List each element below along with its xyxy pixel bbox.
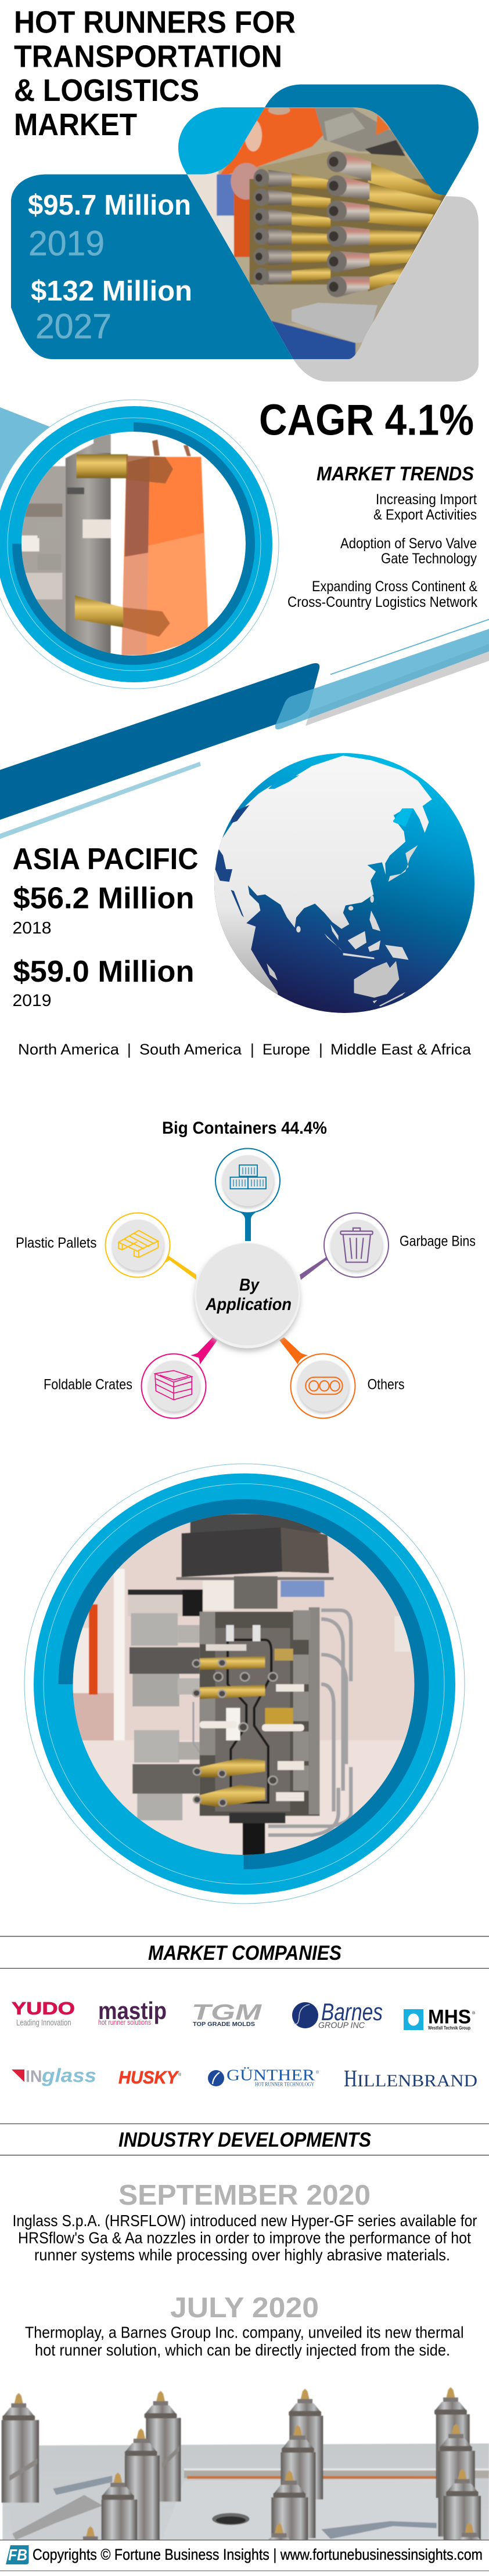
hub: by application [195,1243,300,1351]
2019 value [13,955,194,1010]
logo: Barnes [292,1998,383,2031]
trend 2 [340,536,477,567]
text block: Asia Pacific [13,842,199,1010]
diagonal ribbons [0,620,489,839]
development: September 2020: SEPTEMBER 2020 [118,2180,371,2211]
land: Eurasia and Africa [214,755,432,994]
heading: market trends: MARKET TRENDS [317,463,474,485]
footer [0,2540,489,2571]
logo: Inglass: glass [41,2064,96,2086]
logo: Inglass [12,2064,96,2086]
stat: 2027 value: $132 Million [31,276,192,307]
node: foldable crates [142,1354,206,1418]
icon: crate [155,1370,192,1400]
logo: Inglass: IN [26,2068,42,2086]
text: other regions: North America [18,1041,120,1058]
label: plastic pallets: Plastic Pallets [16,1235,96,1251]
shape: blue ring [0,406,272,682]
shape: thin outer ring [24,1464,465,1904]
panel: large circular photo [24,1464,465,1904]
connector: big containers [240,1213,256,1241]
shape: dark blue stats panel [11,174,293,359]
region name: ASIA PACIFIC [13,842,199,876]
right nozzle row [327,151,444,297]
shape: dark blue arc [66,1506,422,1862]
nozzles: middle row [125,2423,475,2541]
icon: bin [340,1228,373,1262]
stat: 2019 value [28,190,191,263]
diagram: by application [16,1149,476,1418]
text: other regions: Europe [263,1041,310,1058]
photo: mould plate with gold cylinders [16,435,208,668]
photo: nozzles on plate [2,2387,489,2553]
title: TRANSPORTATION [14,39,282,74]
logo: Husky: ® [178,2072,182,2077]
stat: 2019 value: $95.7 Million [28,190,191,221]
logo: MHS: MHS [428,2006,471,2028]
photo: brass hot runner nozzles [187,106,468,360]
logo: Husky: HUSKY [118,2067,179,2087]
logo: Hillenbrand [344,2065,477,2092]
2018 value: 2018 [13,919,51,938]
connector: others [279,1337,308,1365]
nozzles: tips at lower edge [82,2514,481,2540]
logo: TGM [192,2000,263,2028]
node: plastic pallets [106,1213,170,1278]
title: & LOGISTICS [14,73,199,108]
2018 value [13,881,194,938]
photo: hot runner assembly [72,1514,415,1859]
text block: market trends [287,463,477,610]
node: garbage bins [324,1213,389,1278]
logo: MHS [404,2006,476,2031]
icon: containers [230,1165,266,1189]
logo: Yudo: Leading Innovation [16,2018,71,2028]
logo: Yudo: YUDO [12,1998,75,2018]
panel: hero shapes [11,85,479,382]
heading: big containers share: Big Containers 44.4% [162,1119,327,1138]
logo: Yudo [12,1998,75,2028]
logo: Gunther [208,2067,319,2088]
development: July 2020: hot runner solution, which can be directly injected from the side. [35,2341,450,2359]
hub: by application: Application [205,1295,292,1314]
logo: Barnes: GROUP INC [318,2021,365,2031]
icon: others [305,1377,343,1394]
logo: Mastip: mastip [98,1997,167,2024]
2019 value: $59.0 Million [13,955,194,989]
shape: light blue lobe [178,107,265,174]
node: others [290,1354,355,1418]
shape: pale triangle behind ring [0,407,64,499]
globe [214,753,474,1013]
logo: Hillenbrand: H [344,2065,357,2092]
shape: grey backing [293,196,479,382]
development: July 2020 [25,2292,463,2359]
trend 1 [373,491,477,523]
logo: Gunther: HOT RUNNER TECHNOLOGY [255,2082,314,2088]
connector: foldable crates [190,1337,217,1365]
title [14,5,296,142]
hub: by application: By [239,1275,260,1295]
trend 3 [287,578,477,610]
trend 2: Gate Technology [381,551,477,567]
development: September 2020: runner systems while processing over highly abrasive materials. [34,2246,450,2264]
2018 value: $56.2 Million [13,881,194,915]
trend 1: & Export Activities [373,506,477,523]
stat: 2027 value [31,276,192,346]
shape: blue ring [34,1474,455,1895]
text: other regions: South America [139,1041,242,1058]
text: other regions [18,1041,472,1058]
development: September 2020 [13,2180,477,2264]
shape: dark blue top [265,85,479,197]
text: other regions: | [127,1041,131,1058]
connector: garbage bins [300,1252,336,1280]
stat: 2027 value: 2027 [35,307,112,346]
panel: circular photo with ring [0,400,279,689]
left nozzle row [254,169,330,285]
icon: pallet [118,1231,158,1257]
trend 1: Increasing Import [376,491,477,508]
nozzles: back row [2,2387,470,2503]
logo: Gunther: ® [316,2070,319,2075]
logo: MHS: ® [472,2011,476,2016]
development: July 2020: JULY 2020 [170,2292,319,2324]
shape: dark blue arc [17,427,250,660]
logo: TGM: TOP GRADE MOLDS [193,2021,255,2028]
stat: 2019 value: 2019 [28,224,105,263]
text: other regions: | [319,1041,323,1058]
logo: TGM: TGM [192,2000,263,2025]
section: industry developments header: INDUSTRY DEVELOPMENTS [118,2129,371,2151]
nozzles: front row [102,2469,481,2542]
2019 value: 2019 [13,992,51,1010]
label: foldable crates: Foldable Crates [44,1376,132,1392]
logos: companies [12,1997,477,2092]
logo: Fortune Business Insights: FB [8,2546,27,2564]
text: other regions: | [250,1041,254,1058]
connector: plastic pallets [160,1252,196,1280]
text: other regions: Middle East & Africa [330,1041,472,1058]
logo: Barnes: Barnes [321,1998,383,2025]
node: big containers [215,1149,280,1213]
logo: MHS: Westfall Technik Group [428,2025,470,2031]
logo: Gunther: GÜNTHER [226,2067,315,2084]
title: MARKET [14,107,137,142]
section: market companies header: MARKET COMPANIES [148,1942,341,1964]
label: others: Others [368,1376,405,1392]
logo: Mastip: hot runner solutions [98,2018,151,2027]
label: garbage bins: Garbage Bins [400,1233,476,1250]
logo: Hillenbrand: ILLENBRAND [357,2071,477,2090]
shape: thin outer ring [0,400,279,689]
title: HOT RUNNERS FOR [14,5,296,39]
